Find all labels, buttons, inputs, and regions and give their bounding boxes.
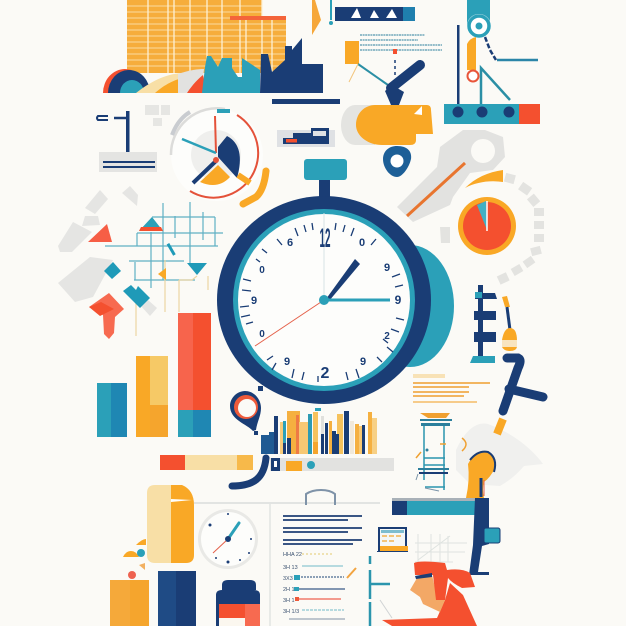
vertical scale [370, 556, 390, 626]
panel: clipboard [194, 490, 380, 626]
numerals: 6 [287, 237, 293, 249]
grey diamonds [58, 186, 157, 316]
small shapes [123, 539, 146, 579]
orange hook [243, 171, 266, 204]
tick marks [240, 223, 404, 382]
numerals: 9 [251, 295, 257, 307]
teal crescent [366, 245, 454, 367]
numerals: 2 [321, 365, 330, 382]
numerals: 9 [284, 356, 290, 368]
flag and robot arm [345, 35, 442, 105]
jar [216, 580, 260, 626]
progress bar: grey [270, 458, 394, 471]
desk [392, 498, 476, 515]
progress rows [289, 554, 345, 619]
bottom bar: orange [110, 580, 149, 626]
standing figure head [466, 452, 495, 498]
row labels: 3H 13 [283, 565, 298, 571]
skyline area chart [103, 38, 323, 93]
clock [217, 159, 454, 404]
icon: crane post [97, 111, 157, 172]
small device icon [277, 128, 335, 147]
arm line [380, 600, 392, 618]
small orange arc [462, 438, 466, 451]
navy rule [272, 99, 340, 104]
body [382, 583, 477, 626]
numerals: 0 [259, 329, 265, 340]
face [410, 575, 445, 612]
numerals [251, 223, 402, 382]
icon: pin line [329, 0, 333, 25]
numerals: 9 [384, 262, 390, 274]
numerals: 12 [320, 223, 330, 253]
bar chart: colored bars [97, 313, 211, 437]
triangles [139, 217, 163, 231]
navy skyline [260, 38, 323, 93]
swooshes [136, 69, 207, 93]
banner with triangles [335, 7, 415, 21]
scaffold icon [416, 413, 452, 491]
text lines [283, 515, 362, 545]
laptop [377, 527, 408, 552]
tan grid lines [136, 260, 208, 336]
numerals: 0 [259, 265, 265, 276]
ring icon [383, 146, 411, 177]
gauge chart [171, 108, 263, 201]
panel: geometric grid diagram [58, 186, 223, 339]
numerals: 9 [395, 293, 402, 307]
red arrow [89, 293, 124, 339]
text lines [360, 35, 442, 50]
bottom bar: navy [158, 571, 196, 626]
hands [326, 259, 360, 301]
numerals: 2 [384, 331, 390, 342]
icon: navy y-shaped arm [497, 358, 543, 434]
grey squares [145, 105, 170, 126]
row labels: 3H 1 [283, 598, 295, 604]
teal grid [105, 202, 223, 288]
numerals: 0 [359, 237, 365, 249]
text lines: orange [413, 374, 490, 403]
bar chart: dense columns [261, 408, 377, 454]
semicircles [103, 69, 150, 93]
teal skyline [202, 56, 260, 93]
row labels: 3H 1/3 [283, 609, 299, 615]
standing figure legs [469, 498, 500, 575]
hair [414, 562, 475, 600]
icon: pennant [312, 0, 321, 35]
stacked column icon [470, 285, 497, 363]
clock icon [198, 509, 258, 569]
folder [147, 485, 194, 563]
progress bar: red and orange [160, 455, 253, 470]
clip [306, 490, 335, 505]
orange cylinder [341, 105, 433, 145]
navy swoosh [232, 458, 266, 486]
background grid [415, 534, 467, 568]
row labels: 3X3 1 [283, 576, 297, 582]
row labels: HHA 22 [283, 552, 302, 558]
robotic arm machine [444, 0, 540, 124]
grey whistle shape [397, 130, 505, 222]
icon: location pin [230, 391, 261, 435]
pie chart with dashed ring [440, 170, 544, 285]
icon: paint brush [502, 296, 517, 351]
panel: orange grid chart [127, 0, 286, 73]
row labels: 2H 1 [283, 587, 295, 593]
row labels [283, 552, 302, 615]
case [217, 196, 431, 404]
numerals: 9 [360, 356, 366, 368]
pencil [347, 568, 356, 578]
headband [415, 573, 432, 579]
grey gear behind [456, 424, 543, 486]
teal diamonds [104, 262, 121, 279]
crown [304, 159, 347, 197]
person [380, 562, 477, 626]
